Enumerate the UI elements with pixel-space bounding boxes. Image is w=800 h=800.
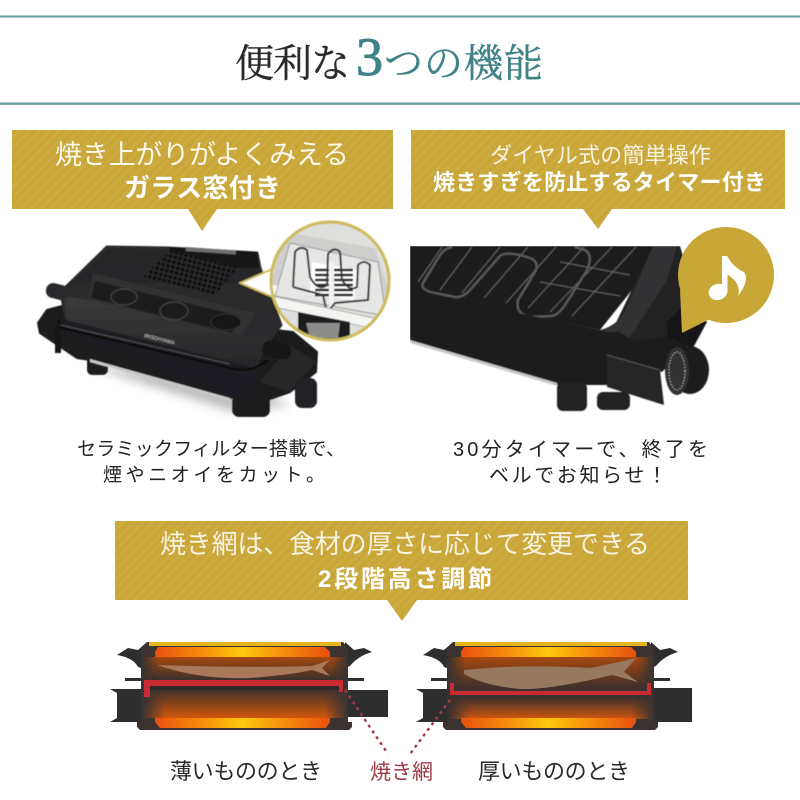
- banner: height adjustment: 焼き網は、食材の厚さに応じて変更できる: [160, 529, 650, 559]
- label: thin food: 薄いもののとき: [170, 759, 322, 784]
- magnified callout: [240, 222, 392, 345]
- silver strip: [90, 359, 230, 401]
- diagram: thick food: [416, 642, 692, 730]
- label: thick food: 厚いもののとき: [478, 759, 630, 784]
- top lid: [455, 642, 647, 646]
- silver strip: [410, 340, 557, 386]
- speech bubble: bell note: [678, 227, 774, 333]
- tray inside: [410, 246, 655, 330]
- front wall: [410, 291, 640, 385]
- banner: timer: 焼きすぎを防止するタイマー付き: [433, 170, 766, 195]
- caption: timer: 30分タイマーで、終了を: [453, 438, 708, 461]
- banner: glass window: [12, 130, 393, 231]
- fish: [464, 658, 638, 689]
- banner: height adjustment: [115, 521, 688, 621]
- banner: height adjustment: 2段階高さ調節: [318, 566, 492, 593]
- lid front face: [64, 296, 262, 368]
- handle bar: [58, 320, 268, 370]
- upper heater: [155, 647, 330, 657]
- title: 3: [356, 27, 383, 87]
- caption: ceramic filter: セラミックフィルター搭載で、: [77, 438, 345, 460]
- grill cross-section: [110, 642, 388, 722]
- title: つの機能: [384, 43, 543, 86]
- upper heat: [143, 657, 347, 680]
- grill wires: [418, 247, 636, 316]
- lower heat: [449, 697, 653, 719]
- caption: timer: ベルでお知らせ！: [489, 464, 667, 487]
- lower heater: [461, 718, 636, 728]
- diagram: thin food: [110, 642, 388, 730]
- glass window: [88, 273, 255, 335]
- base tray: [38, 306, 317, 402]
- header rule bottom: [0, 102, 800, 105]
- icon: music note: [706, 256, 746, 303]
- timer knob: [665, 346, 709, 395]
- leader lines: [345, 690, 450, 754]
- grill rack: [144, 680, 343, 697]
- control box: [627, 346, 688, 373]
- heating element: [422, 247, 590, 317]
- upper heater: [461, 647, 636, 657]
- panel: height adjustment: [110, 521, 692, 784]
- body lower: [65, 300, 262, 398]
- control strip: [168, 247, 259, 268]
- logo: IRISOHYAMA: [144, 333, 176, 347]
- product photo: grill closed: [38, 222, 392, 417]
- feet: [87, 355, 108, 375]
- knobs: [44, 282, 70, 302]
- caption: timer: [453, 438, 708, 487]
- body top: [62, 247, 281, 366]
- fish: [157, 660, 330, 678]
- rim: [600, 246, 677, 345]
- caption: ceramic filter: [77, 438, 345, 486]
- banner: timer: [411, 130, 785, 229]
- vent panel: [143, 250, 238, 295]
- label: grill net: 焼き網: [370, 761, 433, 784]
- shadow: [85, 365, 290, 412]
- outer body behind rim: [616, 246, 683, 342]
- banner: glass window: 焼き上がりがよくみえる: [55, 140, 349, 170]
- grill rack: [450, 683, 651, 695]
- title: 便利な: [235, 43, 350, 86]
- header rule top: [0, 16, 800, 18]
- product photo: dial close-up: [410, 246, 709, 411]
- lower heat: [143, 688, 347, 718]
- feet: [557, 382, 587, 411]
- panel: timer feature: [410, 130, 785, 487]
- banner: glass window: ガラス窓付き: [124, 173, 281, 203]
- lower heater: [155, 718, 330, 728]
- caption: ceramic filter: 煙やニオイをカット。: [103, 464, 325, 486]
- banner: timer: ダイヤル式の簡単操作: [490, 143, 711, 168]
- top lid: [149, 642, 341, 646]
- upper heat: [449, 657, 653, 689]
- grill cross-section: [416, 642, 692, 722]
- upper side panel: [668, 308, 708, 348]
- title: [235, 27, 543, 87]
- panel: glass window feature: [12, 130, 393, 486]
